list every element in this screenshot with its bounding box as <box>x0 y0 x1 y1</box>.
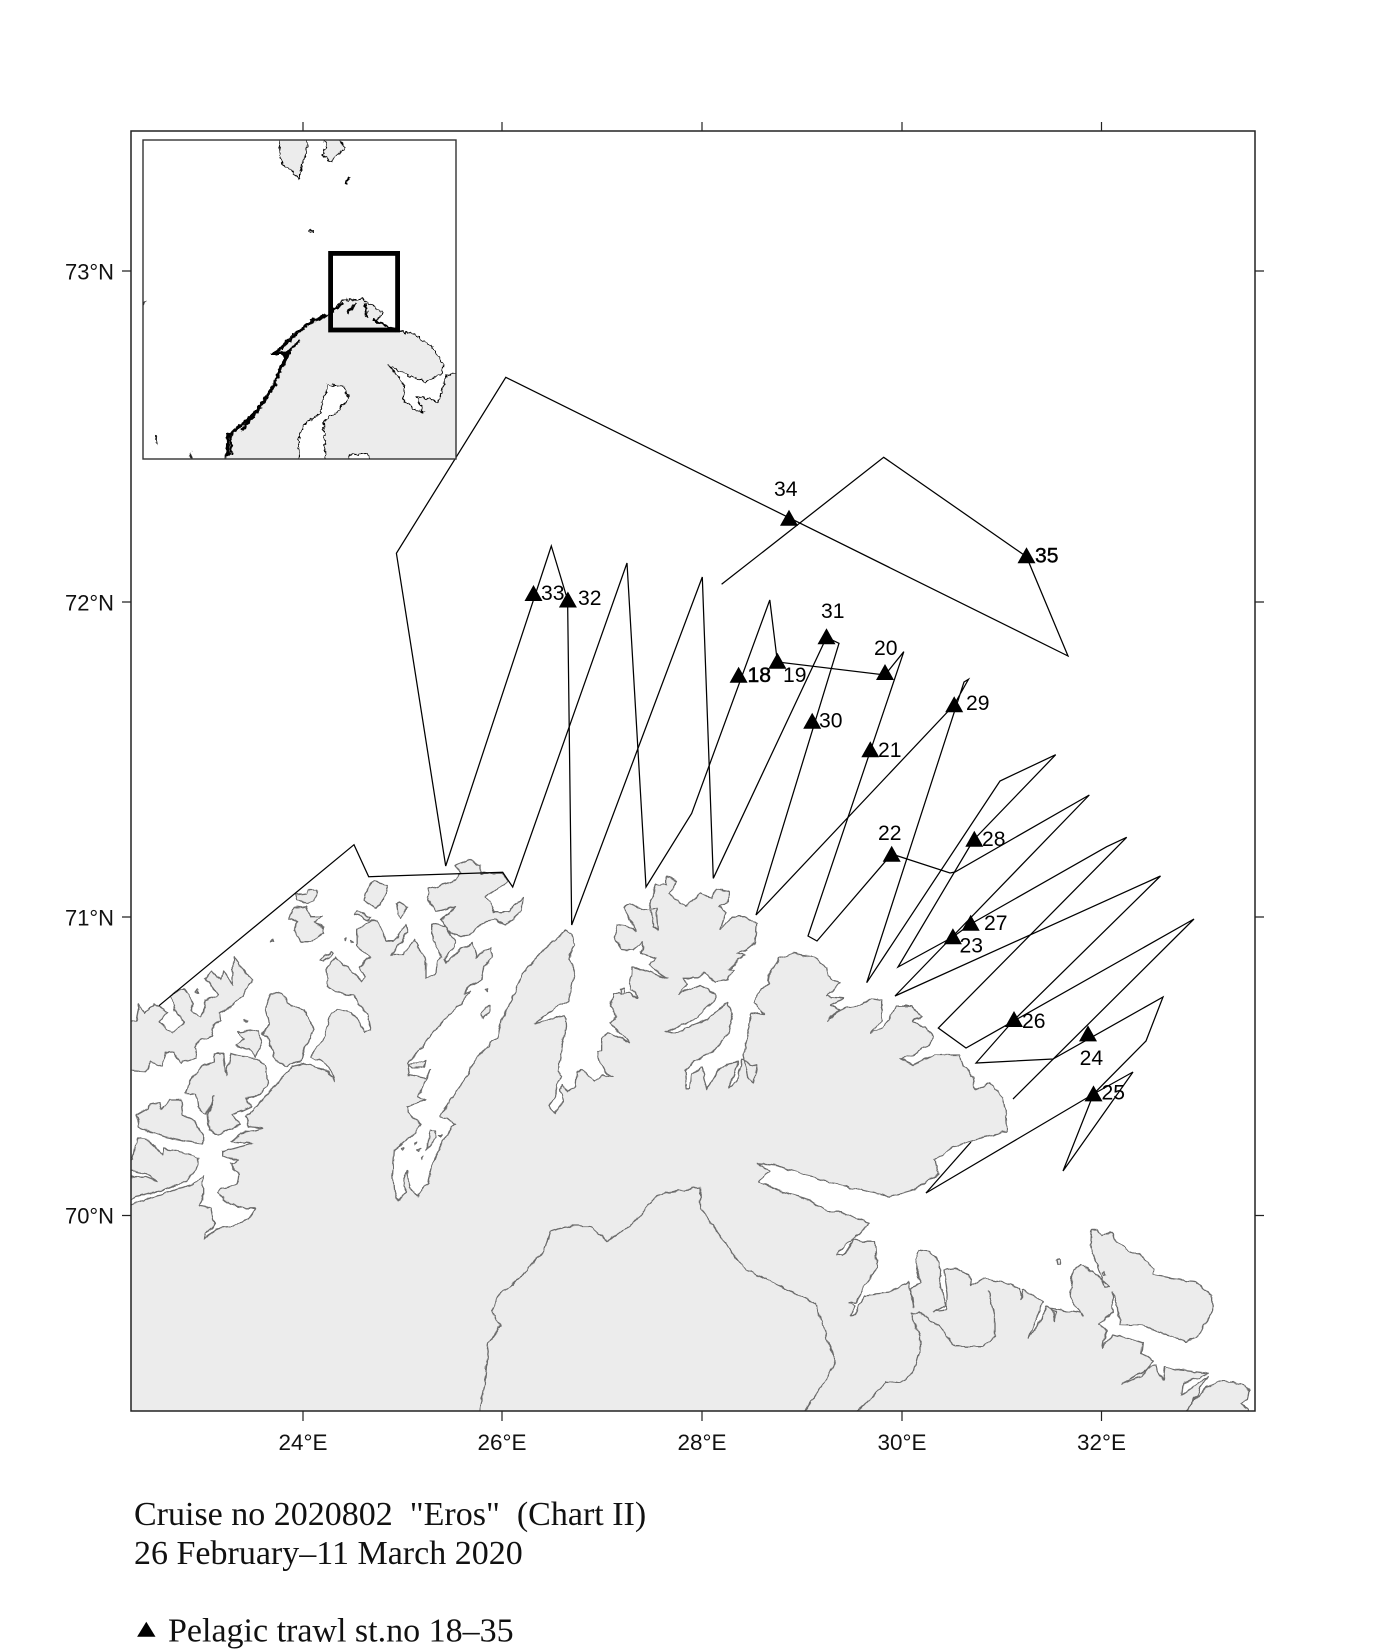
station numbers: 25 <box>1102 1082 1125 1105</box>
Svalbard <box>279 135 307 180</box>
longitude labels: 26°E <box>478 1430 526 1455</box>
station numbers: 26 <box>1022 1010 1046 1033</box>
station numbers: 34 <box>774 478 798 501</box>
land masses <box>118 860 1250 1427</box>
station numbers: 31 <box>821 600 844 623</box>
inset frame <box>143 140 456 459</box>
station numbers: 32 <box>578 587 602 610</box>
station numbers: 33 <box>541 582 564 605</box>
longitude labels: 24°E <box>278 1430 328 1455</box>
station numbers: 35 <box>1035 545 1058 568</box>
station numbers: 27 <box>984 912 1008 935</box>
Scandinavia land <box>226 299 462 465</box>
station numbers: 22 <box>878 822 902 845</box>
Norwegian coast detail <box>227 315 327 457</box>
caption title <box>134 1496 646 1572</box>
mainland coast <box>118 877 1250 1427</box>
station numbers: 20 <box>874 637 898 660</box>
station numbers: 29 <box>966 692 990 715</box>
map panel <box>65 122 1264 1455</box>
station numbers: 19 <box>783 664 806 687</box>
latitude labels: 72°N <box>65 590 114 616</box>
latitude labels <box>65 260 114 1228</box>
islands <box>118 957 253 1072</box>
latitude labels: 70°N <box>65 1204 114 1228</box>
national borders <box>477 1188 835 1420</box>
latitude labels: 71°N <box>65 906 114 930</box>
inset locator map <box>143 135 462 465</box>
latitude labels: 73°N <box>65 260 114 284</box>
Gulf of Bothnia <box>298 385 349 465</box>
longitude labels: 30°E <box>878 1430 926 1455</box>
legend: Pelagic trawl st.no 18–35 <box>168 1613 514 1650</box>
longitude labels: 32°E <box>1077 1430 1126 1455</box>
icon: station triangle <box>137 1622 156 1637</box>
inset study-area box <box>331 253 398 330</box>
station numbers: 18 <box>748 664 771 687</box>
longitude labels: 28°E <box>678 1430 726 1455</box>
caption title: Cruise no 2020802 "Eros" (Chart II) <box>134 1496 646 1533</box>
Gulf of Finland <box>348 453 370 458</box>
map frame <box>131 131 1255 1411</box>
caption title: 26 February–11 March 2020 <box>134 1535 523 1572</box>
cruise track <box>159 377 1194 1193</box>
station numbers: 28 <box>982 828 1006 851</box>
station numbers: 24 <box>1080 1047 1103 1070</box>
longitude labels <box>278 1430 1126 1455</box>
station numbers: 30 <box>819 710 842 733</box>
station numbers: 21 <box>878 739 902 762</box>
station numbers: 23 <box>960 934 983 958</box>
station triangles <box>524 510 1102 1101</box>
station numbers <box>541 478 1125 1105</box>
axis ticks <box>122 122 1264 1421</box>
